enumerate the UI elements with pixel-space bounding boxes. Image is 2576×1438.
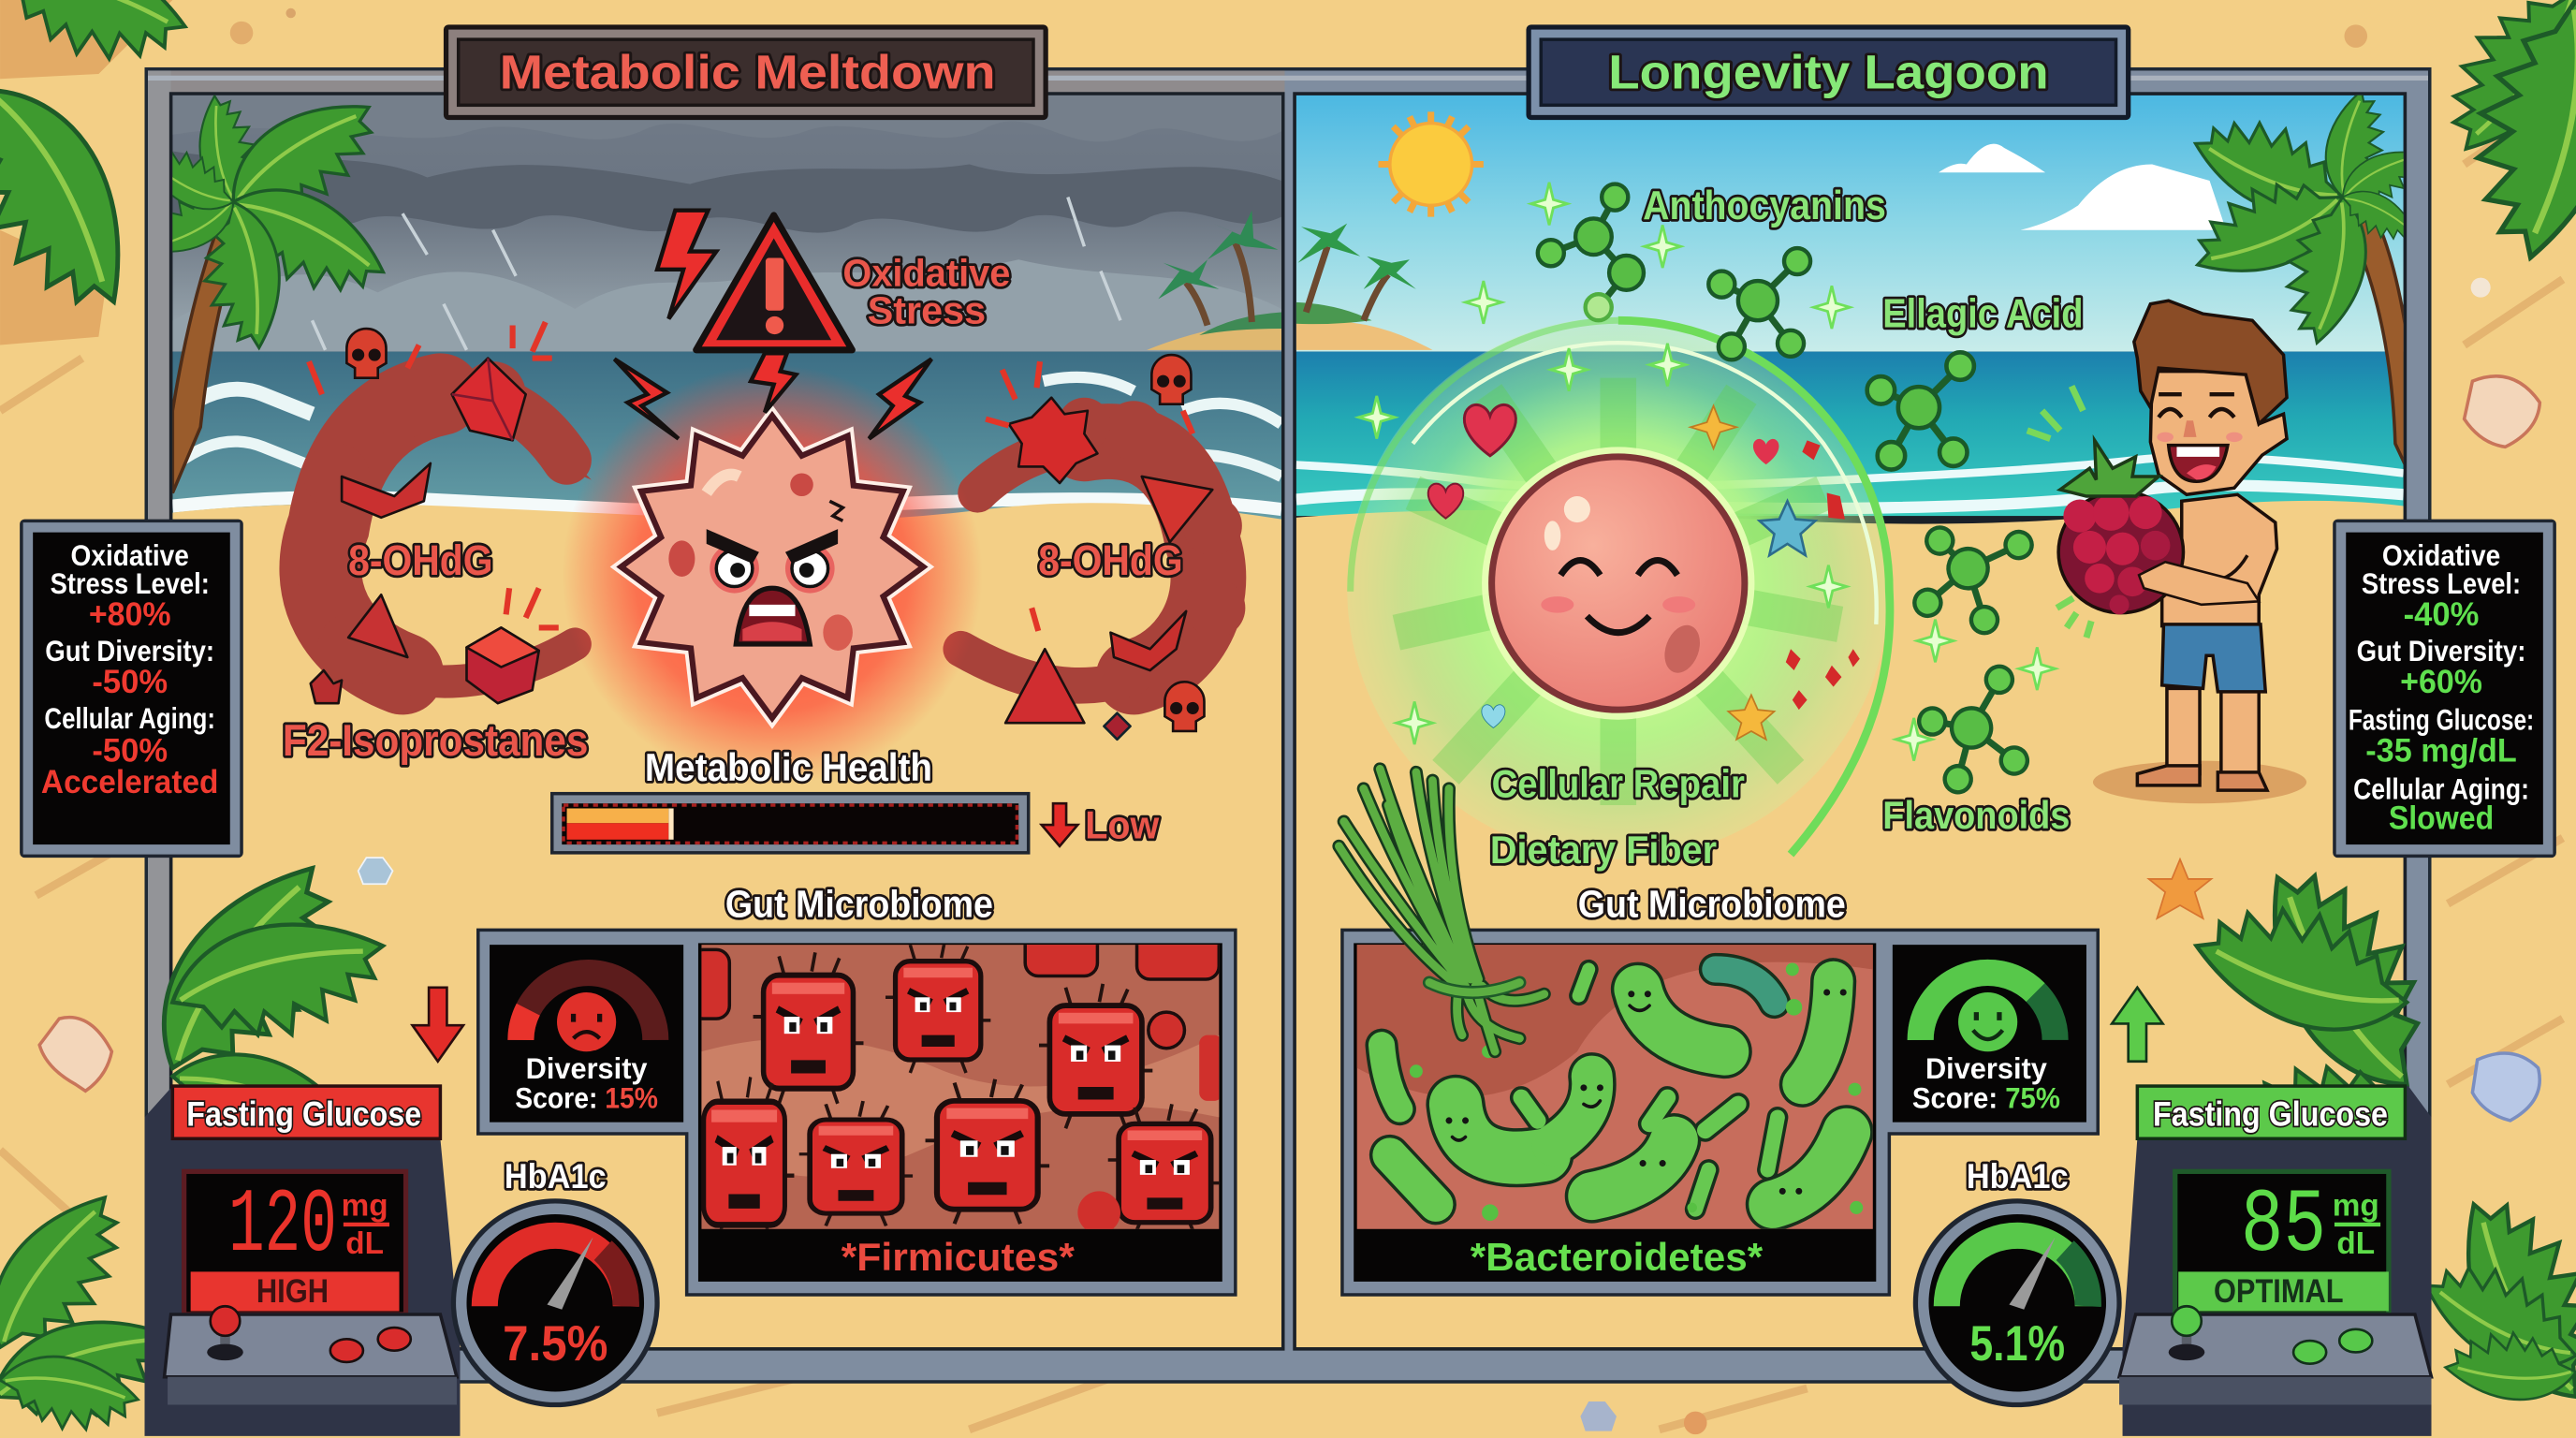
- right microbiome panel: [1342, 930, 2098, 1295]
- left arcade cabinet: fasting glucose: Fasting Glucose: [186, 1094, 421, 1133]
- right stats panel: [2333, 520, 2556, 858]
- left stats panel: -50%: [92, 733, 168, 770]
- right arcade cabinet: fasting glucose: mg: [2333, 1189, 2379, 1224]
- left stats panel: +80%: [89, 596, 171, 633]
- flying sparks: [309, 322, 1193, 631]
- distant island: [1147, 211, 1281, 350]
- right title plaque: [1526, 24, 2130, 120]
- left HbA1c gauge: [453, 1157, 657, 1405]
- clouds: [1939, 144, 2226, 230]
- skulls: [346, 329, 1204, 731]
- right stats panel: Oxidative: [2382, 538, 2500, 572]
- left debris cloud: [283, 361, 592, 685]
- diversity gauge: 15%: Diversity: [526, 1051, 648, 1085]
- torso: [2141, 494, 2277, 626]
- red down arrow: [413, 988, 463, 1062]
- panel: metabolic meltdown scene: [137, 77, 1281, 1347]
- left gut microbiome heading: Gut Microbiome: [725, 882, 993, 925]
- left arcade cabinet: fasting glucose: dL: [345, 1226, 384, 1261]
- left stats panel: Oxidative: [71, 538, 189, 572]
- stormy sea: [172, 352, 1281, 526]
- right stats panel: +60%: [2400, 664, 2482, 700]
- warning triangle with bolts: [614, 211, 931, 439]
- left arcade cabinet: fasting glucose: mg: [342, 1189, 388, 1224]
- diversity gauge: 75%: [1912, 973, 2060, 1114]
- diversity gauge: 15%: Score: 15%: [515, 1080, 658, 1114]
- red bacteria: [701, 945, 1219, 1229]
- right stats panel: Cellular Aging:: [2353, 771, 2529, 805]
- head: [2150, 372, 2287, 494]
- oxidative stress label: Stress: [868, 289, 986, 332]
- left arcade cabinet: fasting glucose: [145, 1086, 460, 1436]
- shorts: [2162, 624, 2265, 692]
- left stats panel: Gut Diversity:: [45, 634, 214, 668]
- legs: [2167, 688, 2259, 777]
- right palm tree: [2178, 86, 2430, 493]
- left HbA1c gauge: 7.5%: [503, 1316, 607, 1372]
- left title plaque: [444, 24, 1048, 120]
- antioxidant molecules: [1538, 184, 2038, 798]
- motion ticks: [2027, 386, 2091, 638]
- right arcade cabinet: fasting glucose: OPTIMAL: [2214, 1273, 2344, 1310]
- sparkles: [1358, 183, 2056, 761]
- oxidative stress label: Oxidative: [842, 251, 1010, 294]
- left stats panel: Cellular Aging:: [44, 701, 215, 735]
- hearts and stars: [1428, 404, 1860, 740]
- beach sand: [172, 503, 1281, 1347]
- 8-OHdG left: 8-OHdG: [348, 536, 493, 584]
- beach sand: [1296, 501, 2404, 1347]
- angry oxidised cell: [621, 416, 923, 718]
- 8-OHdG right: 8-OHdG: [1038, 536, 1183, 584]
- right HbA1c gauge: 5.1%: [1969, 1316, 2065, 1372]
- healing bubble: [1347, 317, 1890, 859]
- right arcade cabinet: fasting glucose: Fasting Glucose: [2153, 1094, 2388, 1133]
- right HbA1c gauge: HbA1c: [1967, 1157, 2069, 1196]
- right stats panel: Stress Level:: [2362, 566, 2521, 600]
- seashells and pebbles: [39, 376, 2539, 1434]
- metabolic health bar: [550, 792, 1030, 855]
- pebble: [359, 858, 393, 884]
- anthocyanins label: Anthocyanins: [1643, 183, 1886, 228]
- panel: longevity lagoon scene: [1296, 86, 2430, 1347]
- ellagic acid label: Ellagic Acid: [1882, 291, 2083, 337]
- green up arrow: [2112, 988, 2163, 1062]
- starfish: [2149, 859, 2211, 918]
- left arcade cabinet: fasting glucose: 120: [228, 1175, 337, 1277]
- diversity gauge: 75%: Diversity: [1925, 1051, 2047, 1085]
- right HbA1c gauge: [1915, 1157, 2119, 1405]
- left palm tree: [172, 95, 386, 494]
- sun: [1379, 111, 1484, 217]
- diversity gauge: 15%: [515, 973, 658, 1114]
- diversity gauge: 75%: Score: 75%: [1912, 1080, 2060, 1114]
- left stats panel: [20, 520, 243, 858]
- right stats panel: -40%: [2404, 596, 2479, 633]
- title: metabolic meltdown: Metabolic Meltdown: [500, 46, 996, 99]
- firmicutes caption: *Firmicutes*: [842, 1235, 1075, 1279]
- left stats panel: -50%: [92, 664, 168, 700]
- happy person holding raspberry: [2058, 301, 2306, 803]
- cellular repair label: Cellular Repair: [1492, 762, 1745, 806]
- right arcade cabinet: fasting glucose: 85: [2241, 1175, 2326, 1277]
- oxidative stress label: [842, 256, 1012, 327]
- right gut microbiome heading: Gut Microbiome: [1578, 882, 1846, 925]
- angry cell glow: [562, 365, 983, 785]
- raspberry: [2058, 440, 2183, 614]
- smiling healthy cell: [1482, 447, 1754, 720]
- flavonoids label: Flavonoids: [1882, 793, 2070, 837]
- left stats panel: Stress Level:: [51, 566, 210, 600]
- dietary fiber bundle: [1339, 769, 1544, 1051]
- angry face: [707, 529, 838, 644]
- bacteroidetes caption: *Bacteroidetes*: [1471, 1235, 1764, 1279]
- left HbA1c gauge: HbA1c: [505, 1157, 607, 1196]
- right stats panel: Slowed: [2389, 800, 2494, 837]
- dietary fiber label: Dietary Fiber: [1490, 828, 1717, 872]
- right arcade cabinet: fasting glucose: dL: [2336, 1226, 2375, 1261]
- red crystal shards: [311, 359, 1212, 740]
- F2-Isoprostanes label: F2-Isoprostanes: [283, 716, 588, 766]
- low arrow: [1042, 803, 1077, 846]
- left microbiome panel: [478, 927, 1236, 1295]
- low label: Low: [1085, 803, 1159, 847]
- metabolic health label: Metabolic Health: [645, 745, 932, 789]
- right stats panel: Gut Diversity:: [2357, 634, 2525, 668]
- right stats panel: -35 mg/dL: [2365, 733, 2517, 770]
- distant island: [1296, 224, 1432, 350]
- right arcade cabinet: fasting glucose: [2119, 1086, 2431, 1436]
- left arcade cabinet: fasting glucose: HIGH: [256, 1273, 329, 1310]
- tropical sea: [1296, 352, 2404, 516]
- right debris cloud: [961, 398, 1245, 685]
- storm clouds: [172, 95, 1281, 352]
- green bacteria: [1382, 962, 1863, 1221]
- title: longevity lagoon: Longevity Lagoon: [1608, 46, 2049, 99]
- left stats panel: Accelerated: [41, 764, 218, 800]
